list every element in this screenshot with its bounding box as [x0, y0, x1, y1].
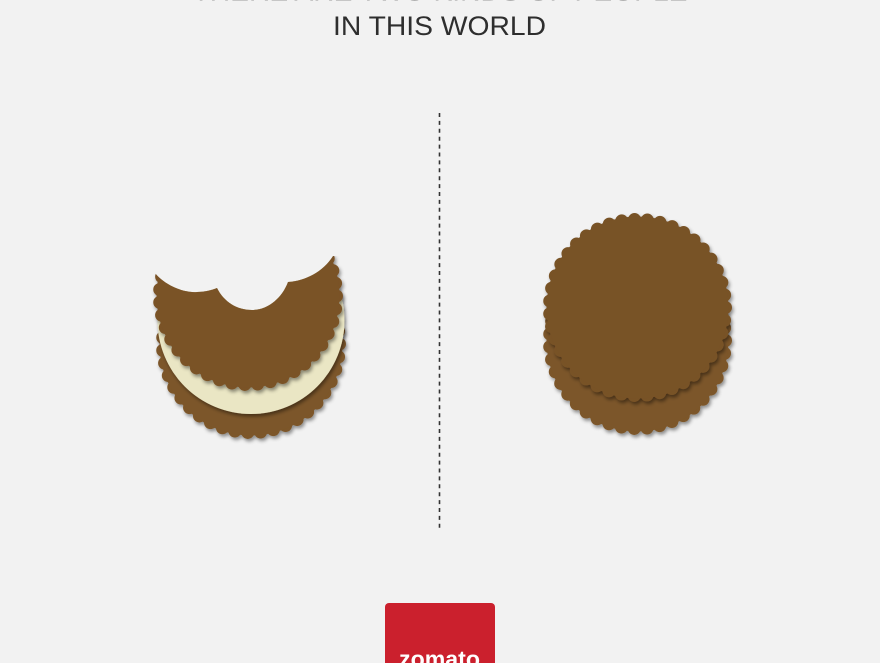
icon: bitten sandwich cookie: [152, 256, 350, 444]
top biscuit: [546, 216, 728, 398]
title: [192, 0, 688, 41]
top biscuit with bite: [152, 256, 347, 396]
icon: whole sandwich cookie: [546, 216, 728, 432]
bottom biscuit: [546, 250, 728, 432]
title: IN THIS WORLD: [333, 11, 546, 41]
logo: zomato: [385, 603, 495, 663]
cream filling: [156, 268, 348, 418]
divider: dashed line: [438, 113, 440, 528]
bottom biscuit: [160, 252, 342, 436]
